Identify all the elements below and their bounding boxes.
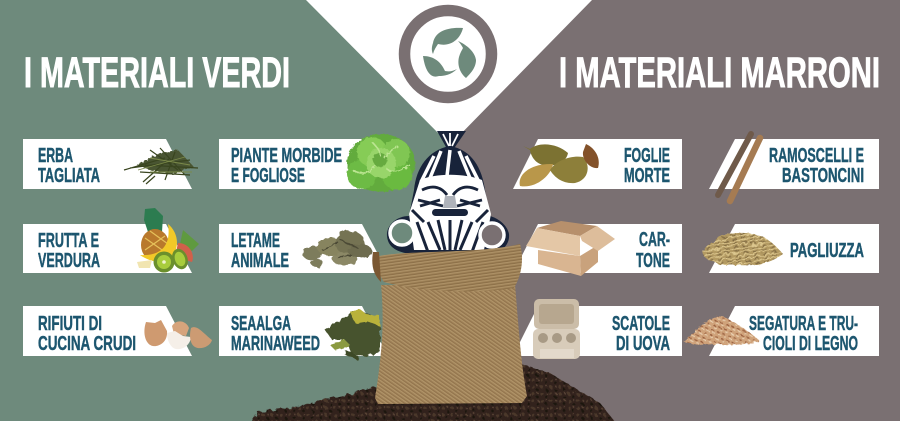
soil mound: [250, 363, 616, 421]
card: ramoscelli e bastoncini: [709, 134, 879, 201]
background: green panel: [0, 0, 450, 421]
icon: egg shells: [144, 320, 212, 349]
card: foglie morte: MORTE: [624, 165, 670, 187]
card: letame animale: LETAME: [231, 230, 280, 252]
icon: fruit: [137, 208, 199, 272]
card: rifiuti di cucina crudi: [23, 306, 212, 356]
card: pagliuzza: [702, 224, 879, 273]
card: foglie morte: [513, 139, 682, 189]
ear ring: left: [390, 221, 414, 245]
card: scatole di uova: SCATOLE: [612, 313, 670, 335]
card: cartone: CAR-: [639, 229, 670, 251]
icon: straw pile: [702, 233, 783, 265]
icon: wood chips: [684, 316, 760, 345]
card: frutta e verdura: [23, 208, 199, 273]
card: erba tagliata: [23, 139, 198, 189]
card: cartone: [513, 221, 682, 276]
card: seaalga marinaweed: MARINAWEED: [231, 333, 320, 355]
card: erba tagliata: ERBA: [38, 145, 73, 167]
card: rifiuti di cucina crudi: CUCINA CRUDI: [38, 333, 136, 355]
card: letame animale: ANIMALE: [231, 250, 289, 272]
card: piante morbide e fogliose: [219, 134, 415, 192]
icon: grass clippings: [124, 148, 198, 184]
card: seaalga marinaweed: SEAALGA: [231, 313, 291, 335]
card: seaalga marinaweed: [219, 306, 388, 358]
card: frutta e verdura: VERDURA: [38, 250, 100, 272]
ear ring: right: [480, 223, 504, 247]
background: brown panel: [450, 0, 900, 421]
card: scatole di uova: DI UOVA: [616, 333, 670, 355]
icon: recycling leaves badge: [404, 10, 492, 98]
card: scatole di uova: [513, 299, 682, 359]
icon: cardboard box: [526, 221, 615, 276]
card: foglie morte: FOGLIE: [624, 145, 670, 167]
icon: lettuce: [347, 134, 415, 192]
card: letame animale: [219, 224, 388, 273]
card: pagliuzza: PAGLIUZZA: [790, 240, 864, 262]
card: piante morbide e fogliose: E FOGLIOSE: [231, 165, 305, 187]
icon: dead leaves: [520, 144, 599, 186]
icon: manure: [302, 231, 372, 267]
card: rifiuti di cucina crudi: RIFIUTI DI: [38, 313, 102, 335]
mask: tribal head in the sack: [387, 131, 509, 254]
icon: seaweed: [325, 309, 380, 358]
card: segatura e trucioli di legno: [684, 306, 879, 356]
card: piante morbide e fogliose: PIANTE MORBIDE: [231, 145, 342, 167]
card: frutta e verdura: FRUTTA E: [38, 230, 99, 252]
icon: twigs: [718, 134, 760, 201]
card: cartone: TONE: [636, 250, 670, 272]
icon: egg carton: [533, 299, 580, 359]
title: i materiali verdi: I MATERIALI VERDI: [24, 49, 290, 97]
jute sack: [372, 244, 527, 404]
card: erba tagliata: TAGLIATA: [38, 165, 100, 187]
